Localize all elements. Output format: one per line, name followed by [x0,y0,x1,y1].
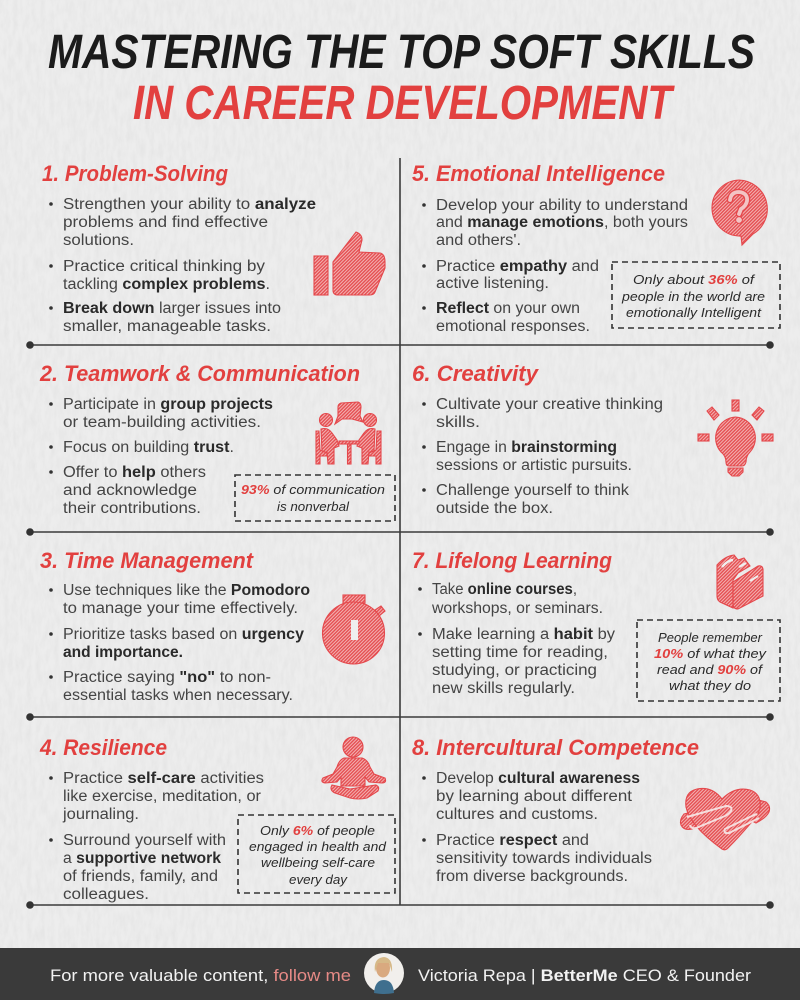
bullet list: resilience [49,770,264,903]
bullet list: teamwork: or team-building activities. [63,414,261,431]
bullet list: intercultural competence: cultures and customs. [436,806,598,823]
panel: teamwork and communication [39,361,395,521]
heading: lifelong learning: 7. Lifelong Learning [412,548,612,573]
bullet list: resilience: journaling. [62,806,139,823]
panel: time management [40,548,385,704]
bullet list: intercultural competence [422,770,652,885]
bullet list: teamwork: and acknowledge [63,482,197,499]
grid dividers [26,158,774,909]
callout: emotional intelligence statistic: people in the world are [621,289,765,304]
callout: emotional intelligence statistic [612,262,780,328]
panel: creativity [412,361,773,517]
panel: intercultural competence [412,735,770,885]
bullet list: intercultural competence: Practice respect and [436,832,589,849]
bullet list: creativity [422,396,663,517]
bullet list: intercultural competence: Develop cultural awareness [436,770,640,787]
bullet list: time management: essential tasks when necessary. [63,687,293,704]
bullet list: lifelong learning: setting time for reading, [432,644,608,661]
bullet list: time management: Practice saying "no" to non- [63,669,271,686]
author credit: Victoria Repa | BetterMe CEO & Founder [418,966,751,985]
heading: intercultural competence: 8. Intercultural Competence [412,735,699,760]
callout: emotional intelligence statistic: Only about 36% of [633,272,756,287]
bullet list: lifelong learning: new skills regularly. [432,680,575,697]
bullet list: creativity: Challenge yourself to think [436,482,629,499]
bullet list: emotional intelligence: Reflect on your own [436,300,580,317]
bullet list: problem-solving: Practice critical thinking by [63,258,265,275]
avatar portrait [364,953,404,994]
bullet list: lifelong learning [418,581,615,697]
title [48,26,755,130]
icon: meditating person [322,737,386,799]
callout: memory statistic: what they do [669,678,751,693]
icon: question speech bubble [712,180,767,245]
bullet list: lifelong learning: studying, or practicing [432,662,597,679]
footer call to action: For more valuable content, follow me [50,966,351,985]
bullet list: teamwork: Participate in group projects [63,396,273,413]
bullet list: problem-solving: tackling complex problems . [63,276,270,293]
bullet list: teamwork [49,396,273,517]
callout: nonverbal communication: is nonverbal [277,499,350,514]
panel: problem-solving [42,161,385,335]
bullet list: resilience: like exercise, meditation, or [63,788,261,805]
bullet list: problem-solving [49,196,316,335]
bullet list: time management [49,582,310,704]
icon: stopwatch [322,595,385,664]
panel: lifelong learning [412,548,780,701]
bullet list: teamwork: Focus on building trust. [63,439,234,456]
callout: nonverbal communication: 93% of communication [241,482,385,497]
callout: emotional intelligence statistic: emotionally Intelligent [626,305,762,320]
callout: memory statistic: 10% of what they [654,646,768,661]
callout: memory statistic [637,620,780,701]
bullet list: creativity: outside the box. [436,500,553,517]
icon: books [717,555,763,609]
bullet list: lifelong learning: Make learning a habit by [432,626,615,643]
heading: emotional intelligence: 5. Emotional Intelligence [412,161,665,186]
footer bar [0,948,800,1000]
callout: self-care statistic: wellbeing self-care [261,855,375,870]
callout: memory statistic: read and 90% of [657,662,764,677]
bullet list: emotional intelligence [422,197,688,335]
panel: resilience [39,735,395,903]
bullet list: resilience: Surround yourself with [63,832,226,849]
bullet list: emotional intelligence: and manage emotions , both yours [436,214,688,231]
bullet list: intercultural competence: from diverse backgrounds. [436,868,628,885]
heading: time management: 3. Time Management [40,548,254,573]
bullet list: creativity: Cultivate your creative thinking [436,396,663,413]
icon: people talking at table [316,402,381,464]
bullet list: problem-solving: problems and find effective [63,214,268,231]
heading: teamwork and communication: 2. Teamwork & Communication [39,361,360,386]
heading: problem-solving: 1. Problem-Solving [42,161,228,186]
callout: nonverbal communication [235,475,395,521]
bullet list: resilience: colleagues. [63,886,149,903]
icon: light bulb [698,400,773,476]
bullet list: emotional intelligence: Practice empathy and [436,258,599,275]
callout: self-care statistic: engaged in health and [249,839,387,854]
bullet list: problem-solving: smaller, manageable tasks. [63,318,271,335]
bullet list: time management: Use techniques like the Pomodoro [63,582,310,599]
icon: heart with paper clips [680,788,770,850]
bullet list: creativity: skills. [436,414,480,431]
callout: self-care statistic: every day [289,872,349,887]
bullet list: time management: and importance. [63,644,183,661]
bullet list: creativity: Engage in brainstorming [436,439,617,456]
bullet list: time management: Prioritize tasks based on urgency [63,626,304,643]
bullet list: emotional intelligence: and others'. [436,232,521,249]
bullet list: time management: to manage your time effectively. [63,600,298,617]
icon: thumbs up [314,232,385,295]
bullet list: emotional intelligence: Develop your ability to understand [436,197,688,214]
callout: self-care statistic [238,815,395,893]
bullet list: lifelong learning: workshops, or seminars. [431,600,603,617]
heading: resilience: 4. Resilience [39,735,167,760]
bullet list: teamwork: Offer to help others [63,464,206,481]
bullet list: teamwork: their contributions. [63,500,201,517]
panel: emotional intelligence [412,161,780,335]
heading: creativity: 6. Creativity [412,361,539,386]
title: IN CAREER DEVELOPMENT [133,77,675,130]
callout: memory statistic: People remember [658,630,763,645]
bullet list: problem-solving: solutions. [63,232,134,249]
bullet list: lifelong learning: Take online courses, [432,581,577,598]
bullet list: problem-solving: Break down larger issues into [63,300,281,317]
bullet list: intercultural competence: by learning about different [436,788,633,805]
bullet list: emotional intelligence: emotional responses. [436,318,590,335]
bullet list: resilience: of friends, family, and [63,868,218,885]
bullet list: resilience: Practice self-care activities [63,770,264,787]
callout: self-care statistic: Only 6% of people [260,823,375,838]
bullet list: creativity: sessions or artistic pursuits. [436,457,632,474]
bullet list: problem-solving: Strengthen your ability to analyze [63,196,316,213]
bullet list: resilience: a supportive network [63,850,221,867]
bullet list: emotional intelligence: active listening. [436,275,549,292]
bullet list: intercultural competence: sensitivity towards individuals [436,850,652,867]
